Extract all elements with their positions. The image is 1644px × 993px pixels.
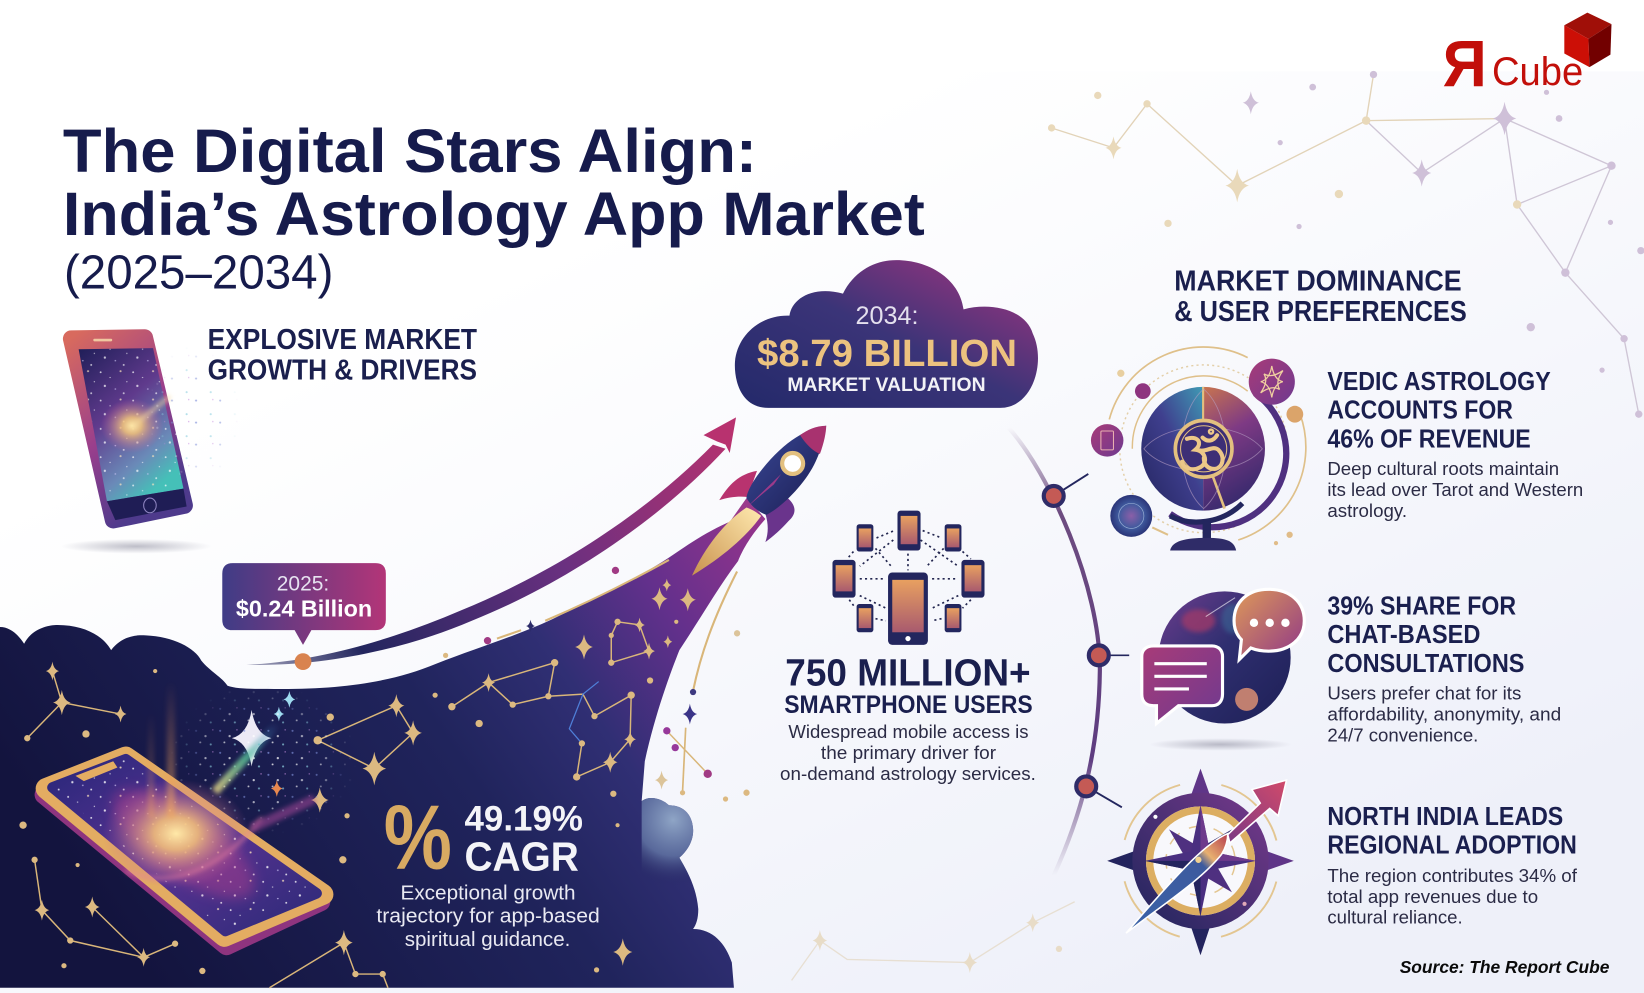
arrow: market growth curve [246,417,736,665]
icon: vedic globe [1091,347,1306,550]
icon: om symbol [1182,430,1223,469]
stat: 49.19% CAGR: % [384,785,452,889]
callout: 2034 market valuation cloud: MARKET VALUATION [787,374,986,396]
icon: compass [1107,769,1294,955]
logo wordmark: Я [1443,26,1487,100]
text block: vedic astrology: VEDIC ASTROLOGY [1327,366,1551,396]
title: (2025–2034) [64,245,333,299]
text block: vedic astrology: 46% OF REVENUE [1327,424,1531,454]
text: CAGR description: trajectory for app-based [376,906,600,928]
constellation: top right [1048,71,1644,418]
icon: tilted smartphone with galaxy burst [44,682,356,946]
text: smartphone users description: on-demand astrology services. [780,763,1036,784]
callout: 2034 market valuation cloud: $8.79 BILLION [757,332,1017,374]
text block: vedic astrology [1327,366,1583,521]
heading: explosive market growth: GROWTH & DRIVERS [208,354,477,386]
icon: rocket [692,426,826,576]
text block: north india: cultural reliance. [1327,907,1463,928]
icon: chat consultation [1142,589,1304,751]
text block: north india: NORTH INDIA LEADS [1327,801,1563,831]
callout: 2025 value: $0.24 Billion [236,596,372,622]
decorative gold trails [443,560,750,802]
heading: market dominance: MARKET DOMINANCE [1174,264,1462,296]
icon: connected smartphones network [832,511,985,645]
logo: RCube [1443,13,1611,100]
text: CAGR description: spiritual guidance. [405,929,570,951]
heading: explosive market growth [208,323,477,386]
title: The Digital Stars Align: [63,117,757,185]
icon: left speech bubble [1142,646,1223,723]
icon: smartphone with galaxy [61,338,240,554]
constellation: bottom centre [792,902,1075,980]
title [63,117,925,299]
text: CAGR description: Exceptional growth [401,883,576,905]
heading: market dominance: & USER PREFERENCES [1174,295,1467,327]
text: smartphone users description: Widespread mobile access is [788,721,1029,742]
compass star [1145,805,1256,916]
stat: 49.19% CAGR: 49.19% [464,798,583,838]
callout: 2025 value [222,563,386,670]
stat: 750 million smartphone users: SMARTPHONE USERS [784,691,1033,719]
stat: 49.19% CAGR: CAGR [464,833,579,879]
text block: chat consultations: CONSULTATIONS [1327,648,1524,678]
text block: vedic astrology: its lead over Tarot and Western [1327,479,1583,500]
panel: dark galaxy swoosh [0,512,765,988]
callout: 2034 market valuation cloud: 2034: [856,302,918,330]
source credit: Source: The Report Cube [1400,957,1609,977]
compass outer points [1107,769,1294,955]
text block: north india: total app revenues due to [1327,886,1538,907]
text block: chat consultations [1327,590,1561,745]
stat: 49.19% CAGR [376,785,600,951]
text: smartphone users description: the primary driver for [821,742,996,763]
logo wordmark: Cube [1492,50,1583,94]
timeline arc with nodes [1009,428,1129,876]
icon: right speech bubble [1234,589,1304,660]
title: India’s Astrology App Market [63,180,925,248]
heading: explosive market growth: EXPLOSIVE MARKET [208,323,477,355]
text block: vedic astrology: ACCOUNTS FOR [1327,394,1513,424]
text block: chat consultations: 39% SHARE FOR [1327,590,1516,620]
callout: 2025 value: 2025: [277,572,329,595]
stat: 750 million smartphone users [780,652,1036,784]
logo wordmark [1443,26,1583,100]
constellations on dark panel [19,579,696,988]
text block: chat consultations: Users prefer chat for its [1327,682,1521,703]
text block: vedic astrology: astrology. [1327,500,1407,521]
text: smartphone users description [780,721,1036,784]
heading: market dominance [1174,264,1467,327]
text: CAGR description [376,883,600,951]
text block: north india [1327,801,1578,928]
callout: 2034 market valuation cloud [735,260,1038,408]
text block: chat consultations: affordability, anonymity, and [1327,703,1561,724]
text block: chat consultations: CHAT-BASED [1327,619,1480,649]
stat: 750 million smartphone users: 750 MILLION+ [785,652,1031,694]
text block: north india: The region contributes 34% of [1327,865,1578,886]
text block: vedic astrology: Deep cultural roots maintain [1327,458,1559,479]
text block: north india: REGIONAL ADOPTION [1327,830,1577,860]
text block: chat consultations: 24/7 convenience. [1327,724,1478,745]
logo cube [1564,13,1611,67]
